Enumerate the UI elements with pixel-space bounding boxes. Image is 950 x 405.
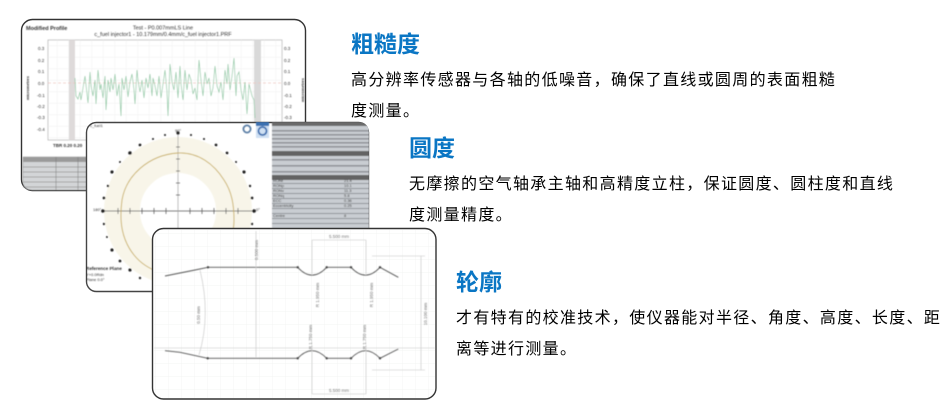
roughness line chart: 0.2 — [284, 58, 291, 63]
text: contour description: 离等进行测量。 — [456, 341, 577, 358]
contour dimension lines and labels: 5.500 mm — [329, 388, 349, 393]
roughness line chart: micrometres — [25, 75, 30, 100]
roundness parameter sidebar — [272, 122, 369, 229]
roundness parameter sidebar: 21.4 — [344, 178, 353, 183]
roughness line chart: -0.2 — [37, 104, 45, 109]
polar roundness chart: Y+0.0Rdn — [86, 272, 104, 277]
contour dimension lines and labels: R 1.950 mm — [315, 282, 320, 307]
roundness parameter sidebar: Centre — [273, 213, 286, 218]
roundness parameter sidebar: RONv — [273, 188, 284, 193]
roundness parameter sidebar: RONq — [273, 193, 284, 198]
panel: contour drawing screenshot — [152, 228, 436, 399]
roughness line chart: -0.1 — [284, 93, 292, 98]
roundness parameter sidebar: 5.8 — [344, 193, 350, 198]
measurement screenshots — [20, 18, 437, 400]
polar roundness chart: 0° — [256, 207, 260, 212]
roughness chart title: Test - P0.007mmLS Line — [133, 26, 193, 32]
heading: roundness: 圆度 — [409, 135, 455, 161]
text: roughness description: 高分辨率传感器与各轴的低噪音，确保了直线或圆周的表面粗糙 — [351, 72, 836, 89]
polar roundness chart: Reference Plane — [86, 266, 122, 271]
roundness parameter sidebar: 0.25 — [344, 203, 353, 208]
roundness parameter sidebar: 11.3 — [344, 188, 352, 193]
contour dimension lines and labels: 5.500 mm — [329, 234, 349, 239]
roughness parameter table — [23, 157, 90, 190]
roughness line chart: 0.0 — [284, 81, 291, 86]
roughness line chart: -0.2 — [284, 104, 292, 109]
contour dimension lines and labels: R 1.950 mm — [369, 282, 374, 307]
roughness line chart: 0.1 — [38, 69, 45, 74]
contour dimension lines and labels: R 1.750 mm — [308, 324, 313, 349]
roundness parameter sidebar: RONp — [273, 183, 285, 188]
polar roundness chart: 90° — [175, 128, 181, 133]
contour dimension lines and labels: 10.100 mm — [423, 302, 428, 325]
roughness line chart: -0.1 — [37, 93, 45, 98]
roundness parameter sidebar: RONt — [273, 178, 284, 183]
polar roundness chart: c_fuel1 — [90, 123, 104, 128]
heading: contour: 轮廓 — [456, 269, 502, 295]
roundness parameter sidebar: 8 — [344, 213, 347, 218]
roughness line chart: 0.1 — [284, 69, 291, 74]
contour dimension lines and labels: 0.500 mm — [254, 240, 259, 260]
panel: roughness profile screenshot — [22, 20, 306, 190]
roughness line chart: 0.2 — [38, 58, 45, 63]
contour profile lines — [165, 267, 398, 358]
roundness parameter sidebar: ECC — [273, 198, 282, 203]
polar roundness chart — [86, 123, 260, 292]
contour measurement points — [206, 266, 381, 359]
view icons — [243, 122, 269, 138]
contour dimension lines and labels — [154, 231, 435, 394]
roughness line chart: micrometres — [300, 77, 305, 102]
polar roundness chart: 180° — [93, 207, 102, 212]
roughness line chart: -0.3 — [37, 115, 45, 120]
roughness line chart: -0.3 — [284, 115, 292, 120]
roughness chart title — [26, 26, 232, 38]
text: roughness description — [351, 71, 836, 120]
text: roundness description: 无摩擦的空气轴承主轴和高精度立柱，保证圆度、圆柱度和直线 — [409, 176, 894, 193]
text: contour description — [456, 309, 941, 358]
roughness line chart — [25, 40, 305, 148]
roughness line chart: 0.3 — [284, 46, 291, 51]
text: roundness description — [409, 175, 894, 224]
roughness chart title: Modified Profile — [26, 26, 67, 32]
contour dimension lines and labels: R 1.750 mm — [362, 324, 367, 349]
text: contour description: 才有特有的校准技术，使仪器能对半径、角度、高度、长度、距 — [456, 310, 941, 327]
heading: roughness: 粗糙度 — [351, 31, 420, 57]
roughness line chart: 0.0 — [38, 81, 45, 86]
roughness line chart: TBR 0.20 0.20 — [53, 143, 83, 148]
panel: roundness polar screenshot — [86, 122, 369, 292]
roundness parameter sidebar: 10.1 — [344, 183, 353, 188]
roughness line chart: -0.4 — [37, 127, 45, 132]
text: roughness description: 度测量。 — [351, 103, 420, 120]
roughness line chart: 0.3 — [38, 46, 45, 51]
polar roundness chart: Plane 0.0° — [86, 277, 105, 282]
roughness chart title: c_fuel injector1 - 10.179mm/0.4mm/c_fuel injector1.PRF — [94, 32, 232, 38]
contour dimension lines and labels: 0.50 mm — [196, 306, 201, 324]
text: roundness description: 度测量精度。 — [409, 207, 513, 224]
roundness parameter sidebar: 0.36 — [344, 198, 353, 203]
roundness parameter sidebar: Eccentricity — [273, 203, 293, 208]
